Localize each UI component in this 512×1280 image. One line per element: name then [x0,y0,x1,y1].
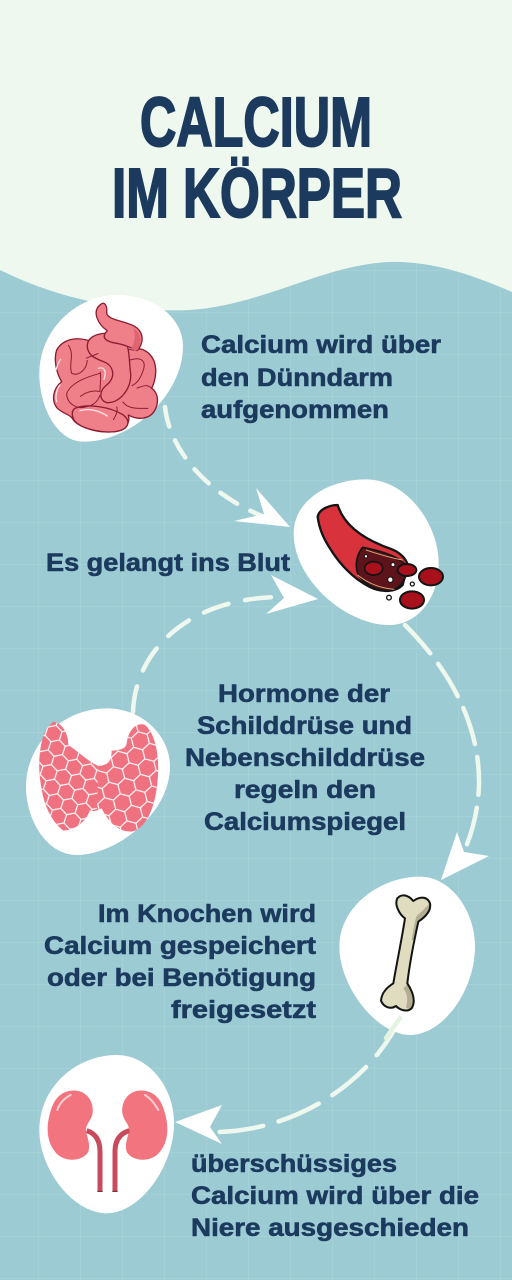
arrow: intestine to blood [165,407,290,527]
blob: intestine background [39,295,183,442]
icon: small intestine [54,303,157,432]
panel: bone step [339,877,475,1035]
text: step 1: Calcium wird über [201,331,441,359]
blob: kidney background [39,1055,174,1213]
text: step 4: Calcium gespeichert [44,932,317,960]
text: step 2: Es gelangt ins Blut [46,549,291,577]
text: step 3: Schilddrüse und [197,712,412,740]
text: step 3: Nebenschilddrüse [185,744,425,772]
text: step 3: Calciumspiegel [204,808,406,836]
arrow: blood to bone [405,625,489,880]
text: step 4 [44,900,317,1024]
text: step 3 [185,680,425,836]
panel: thyroid step [26,708,170,855]
text: step 4: oder bei Benötigung [47,964,316,992]
text: step 1: den Dünndarm [201,364,393,392]
icon: kidneys [48,1091,167,1191]
text: step 5: überschüssiges [191,1150,397,1178]
icon: bone [381,895,430,1011]
text: step 4: freigesetzt [171,996,317,1024]
blob: bone background [339,877,475,1035]
text: step 5: Calcium wird über die [191,1182,479,1210]
text: step 1: aufgenommen [201,396,389,424]
arrow: thyroid to blood [133,575,318,712]
icon: thyroid gland [39,722,158,832]
text: step 3: Hormone der [218,680,390,708]
arrow: bone to kidney [175,1018,400,1144]
text: step 4: Im Knochen wird [98,900,316,928]
text: step 1 [201,331,441,424]
title: IM KÖRPER [112,154,402,232]
text: step 5: Niere ausgeschieden [191,1214,469,1242]
panel: kidney step [39,1055,174,1213]
title [112,83,402,232]
blob: blood background [294,479,439,625]
text: step 3: regeln den [234,776,376,804]
arrow stem on bone blob [386,1018,400,1038]
panel: small intestine step [39,295,183,442]
icon: blood vessel [318,505,443,609]
title: CALCIUM [140,83,372,161]
text: step 5 [191,1150,479,1242]
blob: thyroid background [26,708,170,855]
panel: blood step [294,479,443,625]
header wave background [0,0,512,310]
